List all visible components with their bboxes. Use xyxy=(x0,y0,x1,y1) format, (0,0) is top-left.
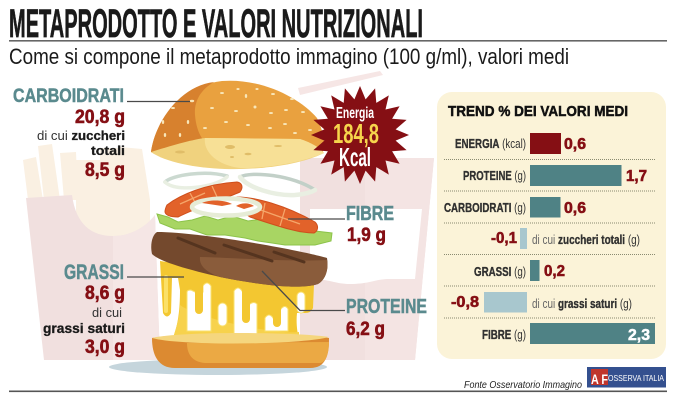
label: proteine: PROTEINE xyxy=(346,296,427,318)
background: drink cup xyxy=(298,71,434,360)
row: zuccheri totali xyxy=(491,228,640,249)
label: grassi xyxy=(43,261,125,358)
label: carboidrati: 8,5 g xyxy=(85,160,125,181)
label: fibre: 1,9 g xyxy=(347,225,386,246)
label: carboidrati: totali xyxy=(91,143,125,158)
label: carboidrati: di cui zuccheri xyxy=(37,129,125,143)
row: grassi: GRASSI (g) xyxy=(474,265,526,279)
label: proteine xyxy=(346,296,427,340)
label: fibre xyxy=(346,203,394,246)
lettuce xyxy=(157,214,332,245)
panel: trend dei valori medi xyxy=(437,92,666,359)
row: zuccheri totali: di cui zuccheri totali (g) xyxy=(532,233,640,247)
label: grassi: 8,6 g xyxy=(85,283,125,304)
top bun xyxy=(151,81,324,169)
row: carboidrati xyxy=(444,197,586,218)
tomato slices xyxy=(165,182,318,233)
shadow under burger xyxy=(109,359,327,375)
row: carboidrati: CARBOIDRATI (g) xyxy=(444,201,526,215)
label: proteine: 6,2 g xyxy=(346,319,385,340)
row: grassi saturi: -0,8 xyxy=(451,294,479,311)
energy unit: Kcal xyxy=(339,142,371,172)
burger illustration xyxy=(151,81,332,368)
row: grassi saturi xyxy=(451,292,632,312)
subtitle: Come si compone il metaprodotto immagino (100 g/ml), valori medi xyxy=(9,44,569,69)
row: energia xyxy=(455,133,586,154)
logo: osserva italia: OSSERVA ITALIA xyxy=(608,373,664,383)
bottom rule xyxy=(9,390,667,392)
row: grassi: 0,2 xyxy=(544,263,565,280)
row: fibre: FIBRE (g) xyxy=(482,328,526,342)
row: grassi xyxy=(474,260,565,281)
source note: Fonte Osservatorio Immagino xyxy=(464,379,582,391)
row: grassi saturi: di cui grassi saturi (g) xyxy=(532,297,632,311)
label: grassi: GRASSI xyxy=(64,261,124,284)
logo: osserva italia: A F xyxy=(591,371,608,387)
row: carboidrati: 0,6 xyxy=(564,200,586,217)
bottom bun xyxy=(152,333,329,368)
panel heading: TREND % DEI VALORI MEDI xyxy=(448,104,628,120)
label: grassi: di cui xyxy=(92,306,122,320)
row: energia: ENERGIA (kcal) xyxy=(455,137,526,151)
energy value: 184,8 xyxy=(333,118,379,149)
leader lines xyxy=(127,102,345,310)
onion rings xyxy=(165,173,315,195)
logo: osserva italia xyxy=(587,367,666,388)
label: carboidrati: 20,8 g xyxy=(75,107,125,128)
row: fibre xyxy=(482,323,655,344)
label: fibre: FIBRE xyxy=(346,203,394,225)
row: proteine xyxy=(463,165,647,186)
row: energia: 0,6 xyxy=(564,136,586,153)
row: proteine: 1,7 xyxy=(626,168,647,185)
energy starburst xyxy=(311,86,409,184)
patty xyxy=(151,232,328,287)
energy label: Energia xyxy=(336,105,374,122)
cheese xyxy=(160,261,314,338)
background: fries box xyxy=(23,144,160,360)
row: fibre: 2,3 xyxy=(628,327,650,344)
label: grassi: 3,0 g xyxy=(85,337,125,358)
label: carboidrati xyxy=(13,85,125,181)
row: zuccheri totali: -0,1 xyxy=(491,230,517,247)
label: grassi: grassi saturi xyxy=(43,320,125,336)
label: carboidrati: CARBOIDRATI xyxy=(13,85,124,107)
row: proteine: PROTEINE (g) xyxy=(463,169,526,183)
